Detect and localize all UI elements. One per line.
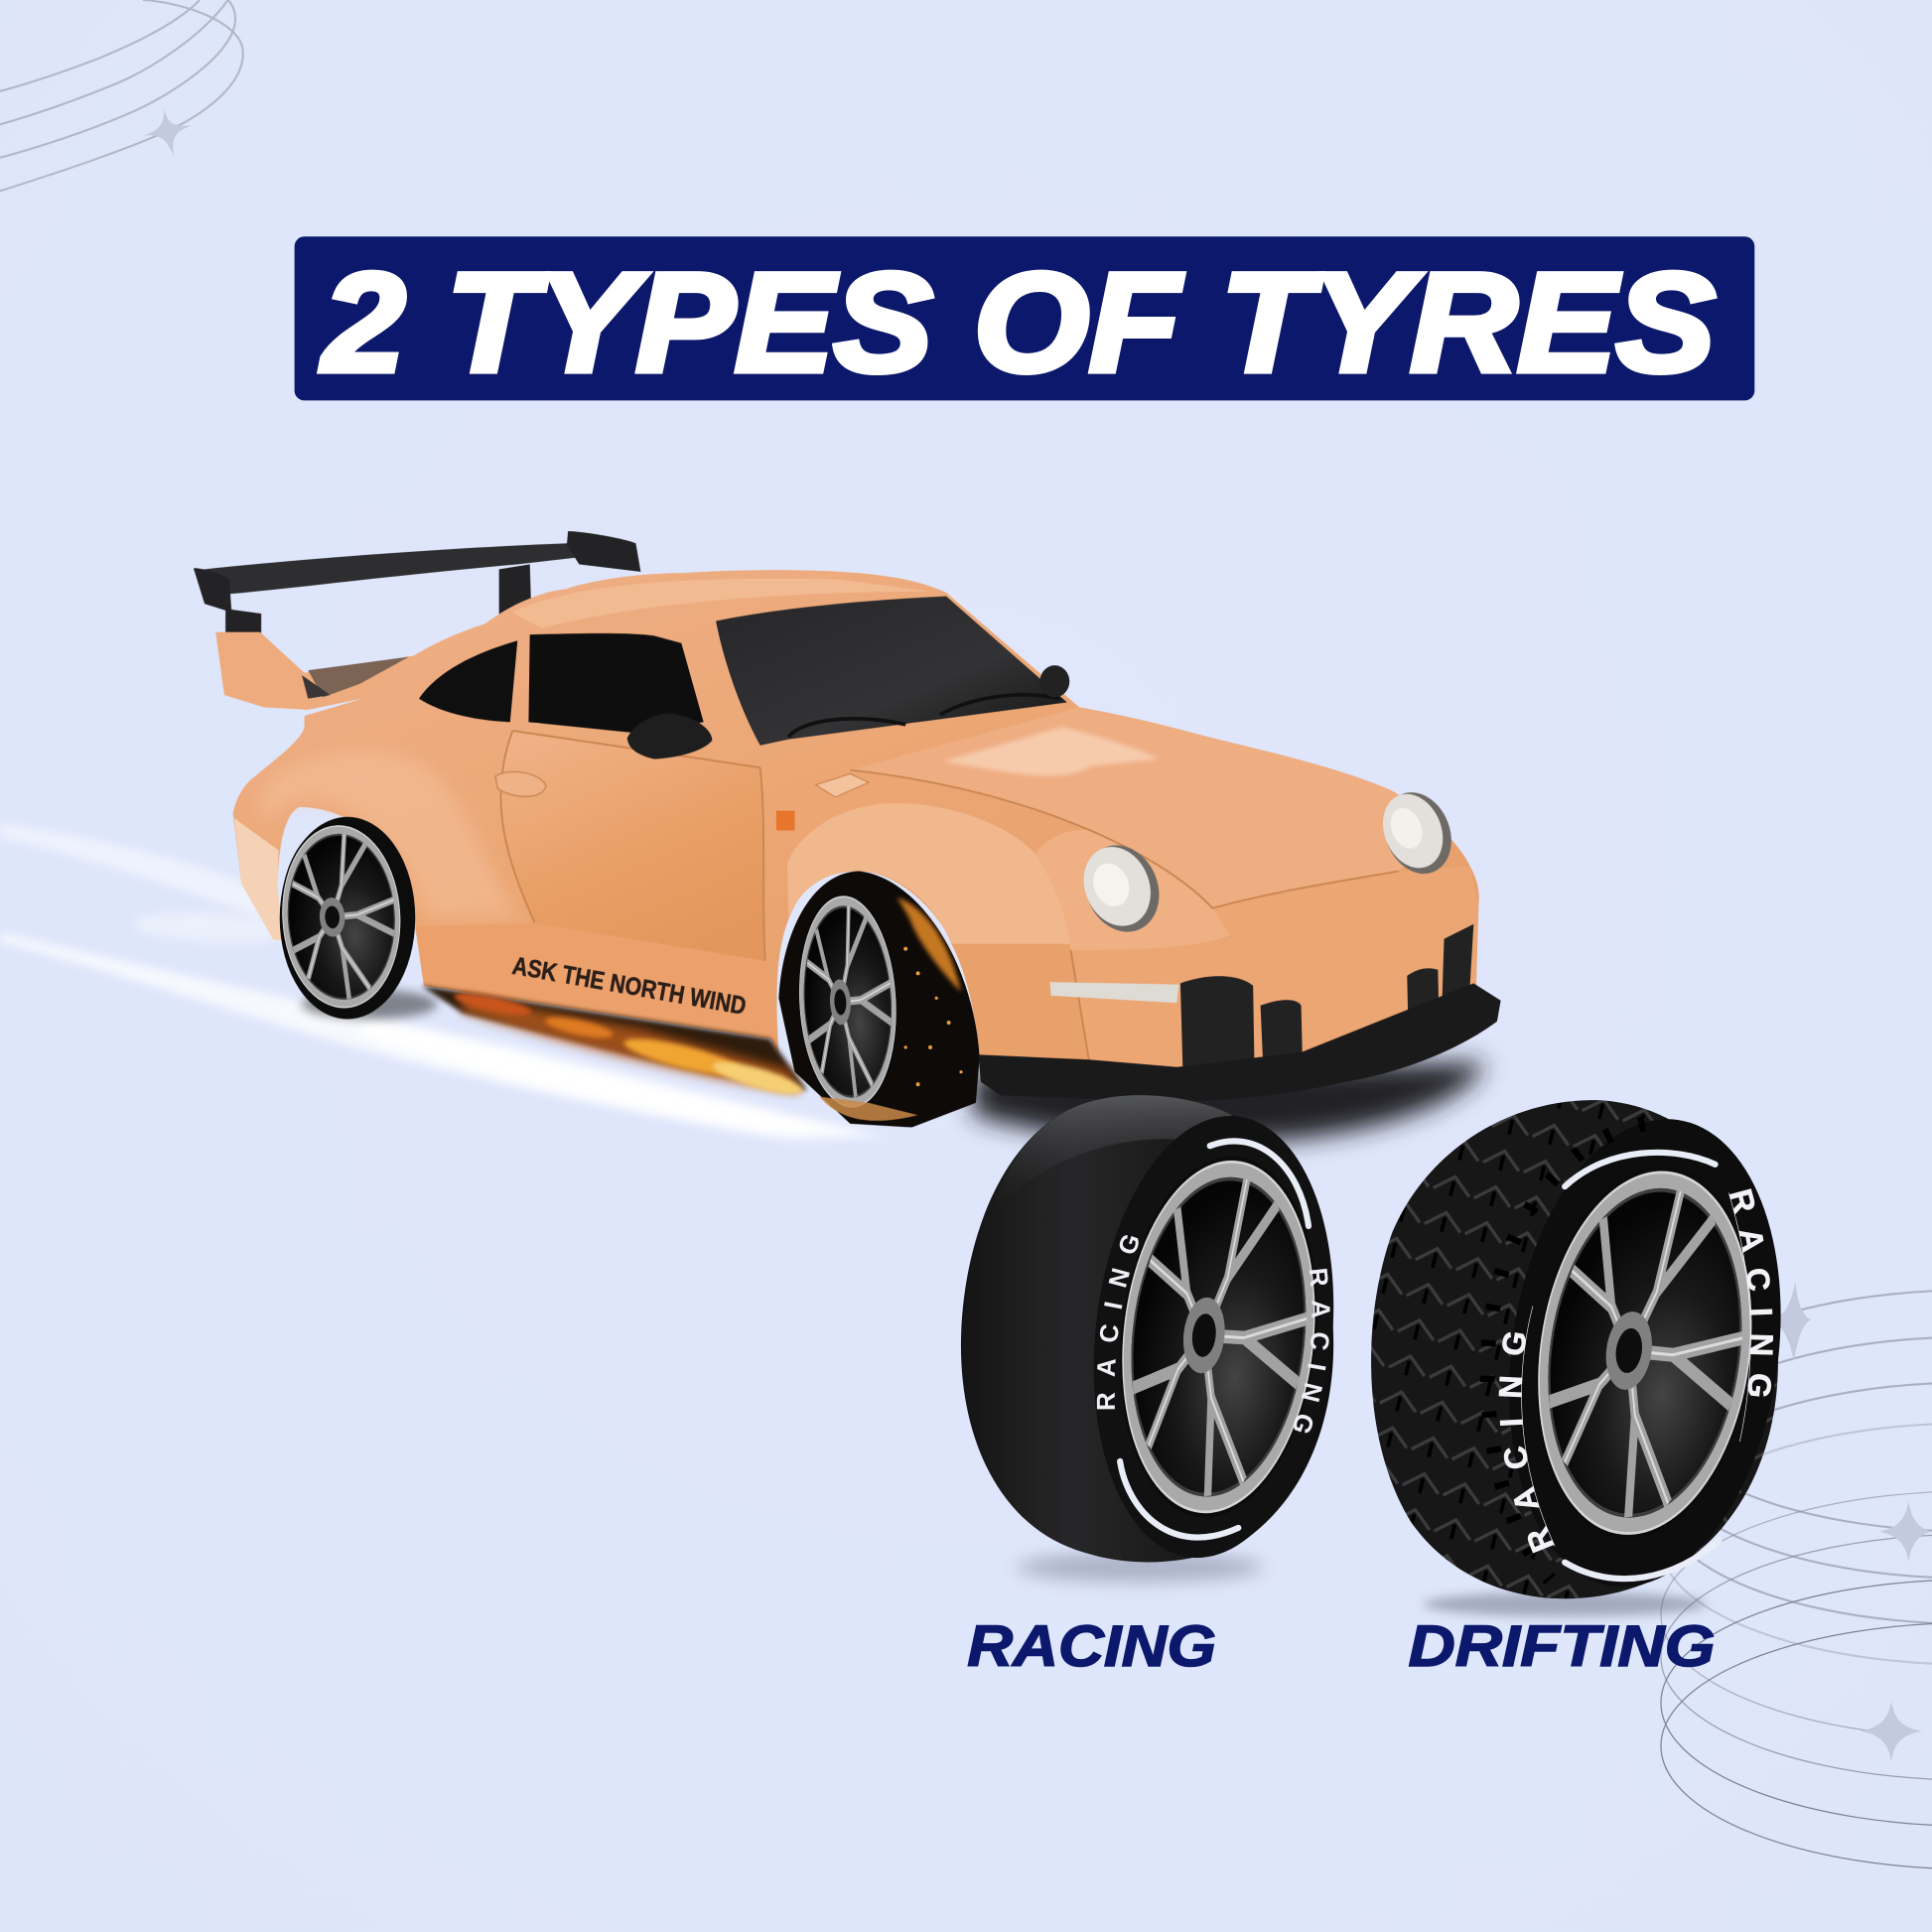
side marker [776, 811, 794, 830]
front arch [778, 871, 980, 1128]
door panel [500, 731, 765, 961]
racing tyre [961, 1095, 1334, 1590]
headlight far [1372, 782, 1463, 884]
rear bumper [234, 818, 282, 940]
racing tyre sidewall [1073, 1104, 1354, 1570]
title banner [295, 236, 1754, 401]
drifting shoulder grooves [1487, 1124, 1645, 1580]
title: 2 TYPES OF TYRES [320, 244, 1716, 401]
speed streaks behind car [0, 823, 888, 1140]
door handle [495, 771, 546, 796]
drifting sidewall text [1499, 1188, 1773, 1553]
car [194, 531, 1501, 1128]
front wheel [793, 891, 963, 1121]
rear wheel shadow [302, 990, 438, 1019]
front bumper [1070, 866, 1478, 1069]
hood [850, 707, 1424, 908]
reflector strip [1049, 982, 1179, 1003]
far mirror [1039, 665, 1069, 697]
sponsor text: ASK THE NORTH WIND [510, 953, 748, 1021]
label: drifting: DRIFTING [1409, 1614, 1716, 1679]
drifting tyre shadow [1423, 1591, 1707, 1616]
icon: sparkle top left [143, 106, 193, 157]
car body [233, 570, 1479, 1069]
hood highlight [942, 727, 1160, 775]
windscreen [716, 597, 1067, 746]
racing tyre rim [1103, 1147, 1334, 1527]
decorative orbit lines: top left [0, 0, 243, 191]
front splitter [978, 983, 1501, 1102]
racing sidewall text: RACING [1096, 1235, 1139, 1410]
side sill [415, 923, 778, 1053]
icon: sparkle right lower [1861, 1701, 1922, 1762]
fuel flap [816, 773, 869, 797]
headlight near [1072, 834, 1172, 943]
rear wing base [215, 632, 415, 710]
door window [528, 633, 704, 733]
spoiler [194, 531, 640, 634]
front fender [787, 803, 1070, 944]
drifting tyre [1371, 1100, 1781, 1622]
icon: sparkle right upper [1772, 1282, 1811, 1361]
drifting tyre sidewall [1480, 1101, 1810, 1604]
car shadow [973, 1062, 1484, 1144]
racing sidewall text: RACING [1294, 1269, 1330, 1434]
racing tyre tread [961, 1095, 1333, 1563]
headlight pod [1035, 830, 1231, 950]
grilles [1180, 924, 1473, 1072]
rear fender highlight [261, 750, 517, 918]
drifting tyre tread [1371, 1100, 1778, 1598]
side mirror [627, 714, 712, 759]
drifting sidewall text: RACING [1729, 1188, 1773, 1397]
drifting pinstripes [1565, 1153, 1719, 1579]
wipers [788, 695, 1059, 737]
rear side window [419, 640, 517, 722]
decorative orbit lines: bottom right [1661, 1290, 1932, 1869]
fire under sill [421, 986, 807, 1100]
drifting sidewall text: RACING [1499, 1332, 1555, 1553]
racing pinstripes [1120, 1141, 1309, 1538]
panel lines [500, 731, 1399, 1062]
label: racing: RACING [967, 1614, 1216, 1679]
racing tyre shadow [1017, 1553, 1263, 1583]
arch sparks [897, 897, 961, 992]
icon: sparkle right middle [1879, 1501, 1932, 1563]
roof highlight [511, 579, 930, 628]
rear wheel [276, 817, 415, 1019]
drifting tyre rim [1513, 1153, 1777, 1554]
lower front panel [951, 944, 1089, 1062]
racing sidewall text [1096, 1235, 1330, 1434]
